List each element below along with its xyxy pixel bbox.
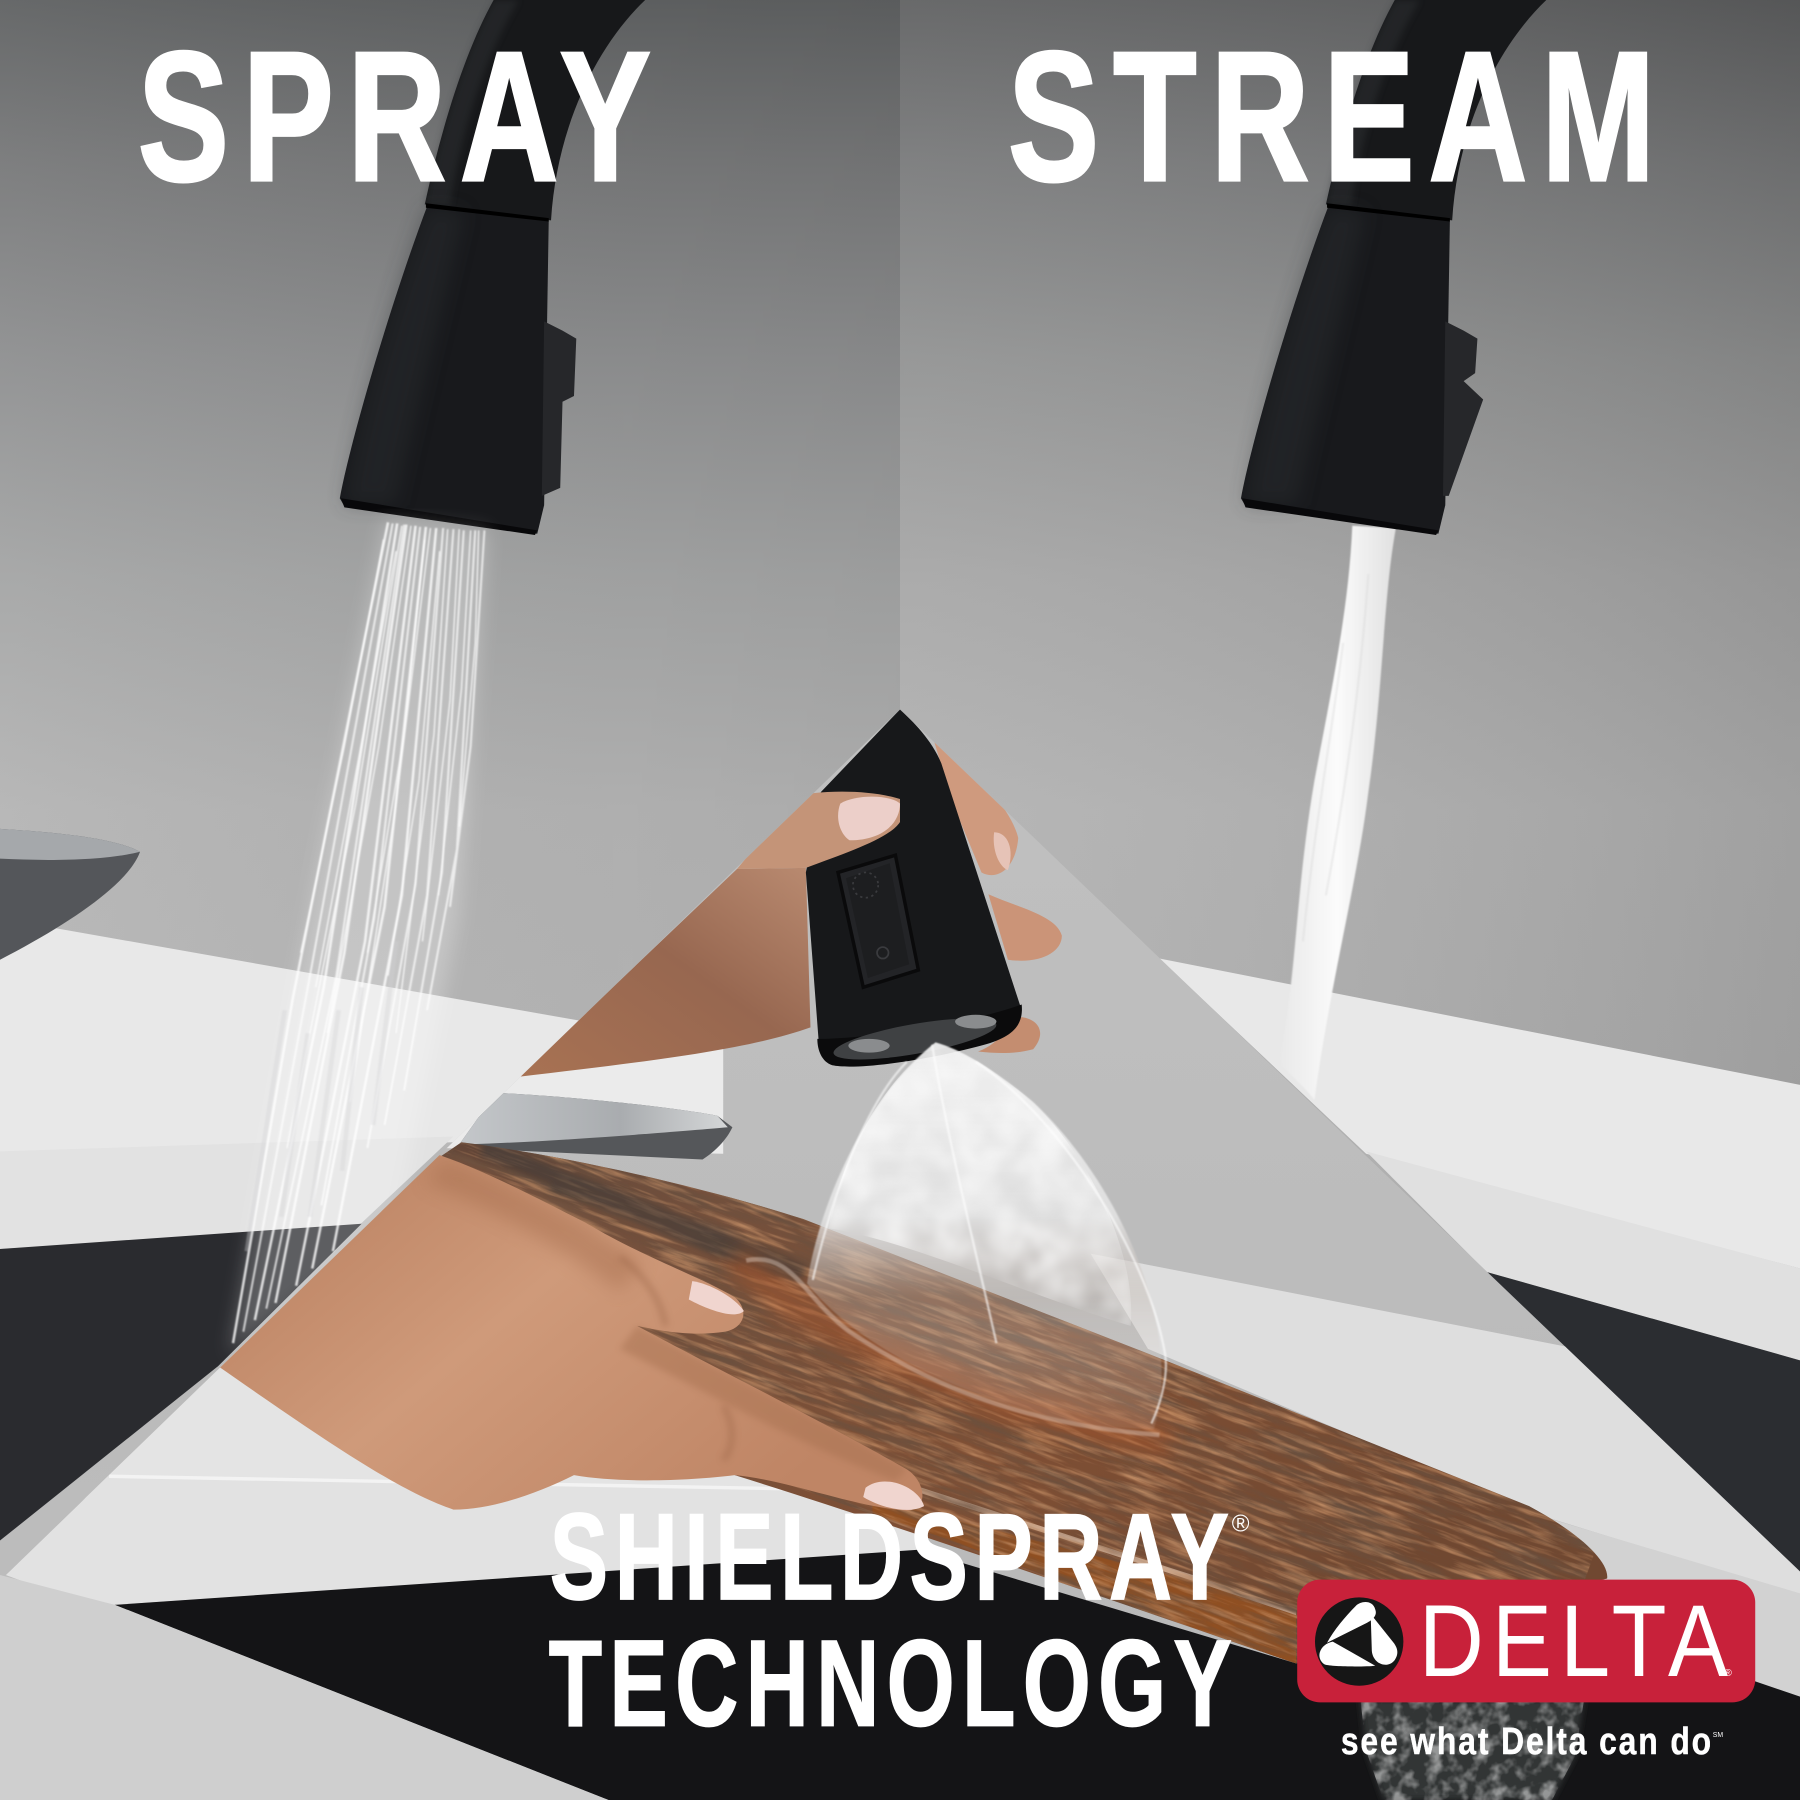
background counter band bbox=[436, 1012, 723, 1154]
panel: bottom left counter corner bbox=[0, 1575, 608, 1800]
panel: spray photo background bbox=[0, 0, 900, 1800]
heading: ShieldSpray Technology: TECHNOLOGY bbox=[549, 1615, 1232, 1752]
heading: ShieldSpray Technology: SHIELDSPRAY bbox=[550, 1488, 1229, 1626]
counter lip in triangle, left bbox=[0, 1475, 918, 1605]
heading: STREAM: STREAM bbox=[1008, 14, 1655, 220]
heading: SPRAY: SPRAY bbox=[138, 14, 651, 220]
palm bbox=[519, 868, 810, 1077]
faucet neck bbox=[425, 0, 645, 220]
thumb nail bbox=[838, 797, 900, 840]
logo: Delta bbox=[1297, 1580, 1755, 1702]
faucet cone bbox=[340, 207, 549, 534]
sprayer toggle switch bbox=[838, 855, 918, 987]
sprayer rim bbox=[817, 1004, 1022, 1067]
icon: vessel bowl left bbox=[0, 829, 140, 960]
panel: central triangle ShieldSpray photo bbox=[0, 709, 1800, 1800]
counter lip in triangle, right bbox=[1538, 1515, 1800, 1697]
icon: vessel bowl in triangle bbox=[459, 1093, 732, 1159]
panel: stream photo background bbox=[900, 0, 1800, 1800]
faucet neck bbox=[1326, 0, 1546, 220]
water: shield spray dome bbox=[746, 1042, 1166, 1435]
counter top right bbox=[1159, 959, 1800, 1268]
logo: Delta: ® bbox=[1724, 1668, 1732, 1679]
back fingers bbox=[932, 735, 1018, 875]
water: spray streams bbox=[230, 519, 488, 1355]
faucet: spray head bbox=[340, 0, 645, 535]
faucet: stream head bbox=[1241, 0, 1546, 535]
hand holding sprayer bbox=[519, 735, 1062, 1077]
faucet toggle button bbox=[542, 321, 576, 496]
sink basin left bbox=[0, 1224, 362, 1541]
tagline: see what Delta can do bbox=[1341, 1721, 1711, 1763]
tagline: SM bbox=[1713, 1732, 1723, 1739]
water falling from board bbox=[1360, 1699, 1584, 1800]
pull-down sprayer head bbox=[806, 709, 1022, 1068]
wordmark: DELTA bbox=[1419, 1585, 1728, 1698]
counter front lip left bbox=[0, 1136, 453, 1249]
heading: ShieldSpray Technology bbox=[549, 1488, 1250, 1752]
hand holding board bbox=[218, 1153, 924, 1511]
faucet toggle button, pressed bbox=[1443, 321, 1483, 496]
counter top in triangle, right bbox=[1091, 1254, 1800, 1596]
water: stream bbox=[1279, 526, 1396, 1100]
faucet cone bbox=[1241, 207, 1450, 534]
wooden cutting board bbox=[442, 1142, 1608, 1664]
sink basin in triangle bbox=[115, 1550, 1800, 1800]
thumb on sprayer bbox=[737, 792, 900, 869]
counter top left bbox=[0, 918, 585, 1154]
counter front lip right bbox=[1366, 1151, 1800, 1360]
icon: Delta triangle mark bbox=[1315, 1597, 1403, 1686]
heading: ShieldSpray Technology: ® bbox=[1232, 1510, 1250, 1537]
counter top in triangle, left bbox=[85, 1311, 772, 1498]
fingernails bbox=[689, 1281, 744, 1314]
wall bbox=[453, 710, 1800, 1660]
sink basin right bbox=[1487, 1272, 1800, 1575]
